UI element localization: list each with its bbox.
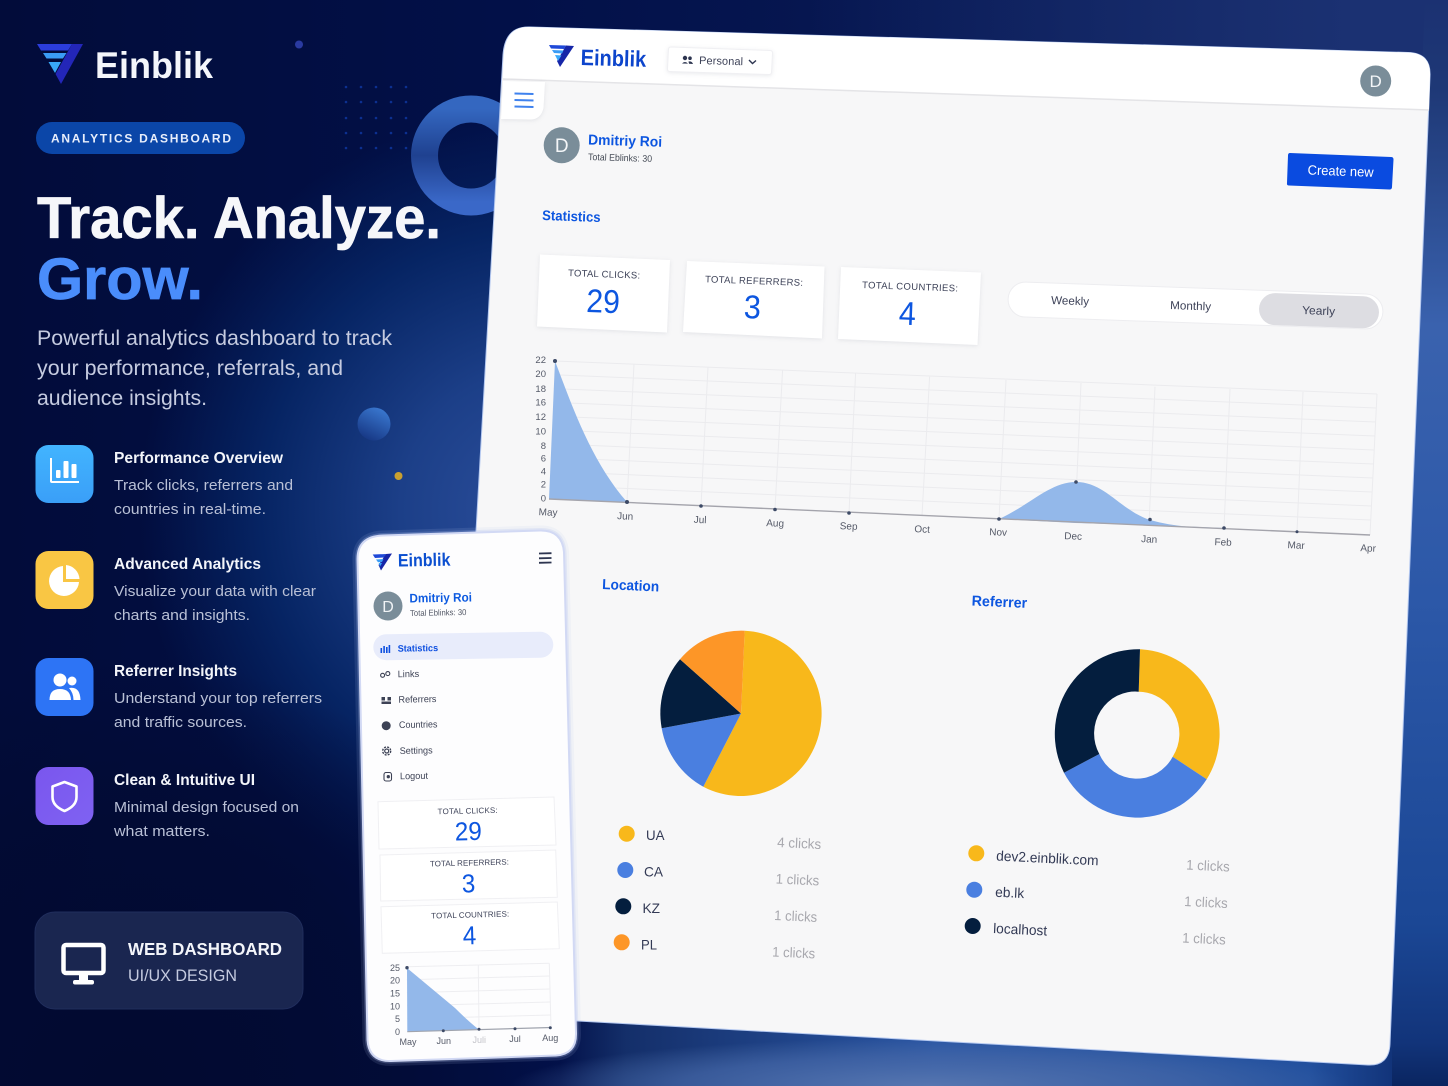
area: second peak <box>999 482 1224 528</box>
user profile <box>544 127 662 165</box>
headline: Track. Analyze. <box>37 186 441 251</box>
stat card: total clicks <box>537 254 670 332</box>
click counts <box>772 834 822 961</box>
brand logo <box>37 44 213 86</box>
web dashboard card <box>35 912 303 1009</box>
hamburger tab <box>501 81 545 120</box>
x axis labels: Sep <box>839 521 858 533</box>
referrer section: Referrer <box>971 594 1028 612</box>
user profile: Total Eblinks: 30 <box>588 152 652 165</box>
period toggle: Yearly <box>1302 305 1336 318</box>
feature: clean and intuitive ui: Minimal design focused on <box>114 799 299 816</box>
navigation menu: Logout <box>400 771 428 782</box>
x axis labels: Jan <box>1141 534 1157 546</box>
brand name: Einblik <box>580 45 647 72</box>
location section: Location <box>602 577 659 595</box>
intro paragraph <box>37 327 393 410</box>
grid lines <box>550 361 1377 535</box>
panel: mobile dashboard <box>357 530 576 1061</box>
user profile: D <box>555 136 569 157</box>
icon: statistics <box>380 645 390 653</box>
icon: people <box>36 658 94 716</box>
x axis labels <box>538 507 1377 555</box>
feature: performance overview <box>36 445 293 518</box>
legend <box>965 845 1099 939</box>
period toggle <box>1008 281 1383 330</box>
location section <box>602 577 822 961</box>
icon: links <box>381 672 390 677</box>
feature: advanced analytics <box>36 551 316 624</box>
click counts: 1 clicks <box>1184 893 1228 911</box>
feature: advanced analytics: charts and insights. <box>114 607 250 624</box>
donut chart <box>1055 649 1220 818</box>
legend: UA <box>646 827 665 843</box>
stat card: total clicks: TOTAL CLICKS: <box>438 806 498 816</box>
data points <box>553 359 1298 533</box>
stat card: total countries: TOTAL COUNTRIES: <box>862 280 958 295</box>
click counts: 1 clicks <box>774 907 818 925</box>
legend: KZ <box>642 900 660 916</box>
panel: desktop dashboard <box>450 27 1430 1065</box>
click counts: 1 clicks <box>1182 930 1226 948</box>
stat card: total referrers: 3 <box>461 868 476 898</box>
feature: referrer insights: Referrer Insights <box>114 663 237 680</box>
legend: CA <box>644 864 664 880</box>
create new button: Create new <box>1307 163 1374 180</box>
click counts <box>1182 857 1230 948</box>
feature: referrer insights: and traffic sources. <box>114 714 247 731</box>
y axis labels: 20 <box>390 976 400 986</box>
header bar <box>503 27 1430 110</box>
y axis labels: 8 <box>541 441 546 452</box>
x axis labels: Jun <box>436 1036 451 1046</box>
x axis labels <box>399 1033 558 1047</box>
feature: clean and intuitive ui: what matters. <box>113 823 210 840</box>
x axis labels: Mar <box>1287 540 1306 552</box>
stat card: total referrers: TOTAL REFERRERS: <box>430 858 509 868</box>
x axis labels: Feb <box>1214 537 1232 549</box>
icon: referrers <box>382 697 391 704</box>
navigation menu <box>373 632 553 782</box>
icon: settings <box>383 747 391 755</box>
area chart <box>535 355 1377 555</box>
stat card: total referrers <box>683 261 824 338</box>
icon: bar chart <box>36 445 94 503</box>
x axis labels: Oct <box>914 524 930 536</box>
y axis labels: 5 <box>395 1014 400 1024</box>
feature: advanced analytics: Advanced Analytics <box>114 556 261 573</box>
x axis labels: Nov <box>989 527 1007 539</box>
icon: logo small <box>373 554 392 570</box>
x axis labels: Aug <box>766 518 784 530</box>
pie chart <box>660 631 822 796</box>
x axis labels: Juli <box>473 1035 486 1045</box>
legend: localhost <box>993 920 1048 939</box>
feature: referrer insights <box>36 658 322 731</box>
navigation menu: Referrers <box>398 694 437 706</box>
y axis labels: 4 <box>541 466 546 478</box>
stat card: total countries <box>381 902 559 953</box>
decorative sphere <box>358 408 390 440</box>
web dashboard card: WEB DASHBOARD <box>128 939 282 959</box>
y axis labels: 18 <box>535 384 546 395</box>
x axis <box>407 1028 551 1032</box>
navigation menu: Statistics <box>398 643 438 655</box>
x axis labels: Jul <box>509 1034 521 1044</box>
y axis labels: 10 <box>390 1002 400 1012</box>
y axis labels: 12 <box>535 412 546 423</box>
stat card: total referrers: TOTAL REFERRERS: <box>705 274 803 289</box>
y axis labels: 0 <box>395 1027 400 1037</box>
y axis labels: 16 <box>535 398 546 408</box>
headline: Grow. <box>37 247 203 312</box>
y axis labels: 10 <box>535 426 546 438</box>
y axis labels: 15 <box>390 988 400 998</box>
y axis labels: 6 <box>541 454 546 464</box>
y axis labels: 25 <box>390 963 400 973</box>
feature: clean and intuitive ui <box>36 767 299 840</box>
dropdown: personal: Personal <box>699 55 743 68</box>
headline <box>37 186 441 312</box>
stat card: total clicks: TOTAL CLICKS: <box>568 268 640 282</box>
stat card: total referrers <box>380 850 557 901</box>
x axis <box>549 499 1370 535</box>
icon: monitor <box>64 945 104 984</box>
x axis labels: Jul <box>693 515 707 526</box>
stat card: total clicks <box>378 797 556 849</box>
web dashboard card: UI/UX DESIGN <box>128 966 237 985</box>
x axis labels: Apr <box>1360 543 1377 555</box>
y axis labels: 22 <box>535 355 546 366</box>
active menu item <box>373 632 553 660</box>
header bar: D <box>1370 72 1382 91</box>
avatar <box>1360 66 1391 96</box>
phone glow <box>357 530 576 1061</box>
navigation menu: Links <box>398 669 419 680</box>
user profile: Dmitriy Roi <box>409 590 472 605</box>
icon: logo <box>37 44 83 84</box>
badge <box>36 122 245 154</box>
legend <box>614 826 665 952</box>
y axis labels: 20 <box>535 369 546 380</box>
feature: performance overview: Track clicks, referrers and <box>114 477 293 494</box>
navigation menu: Countries <box>399 719 438 731</box>
x axis labels: Jun <box>617 511 633 523</box>
period toggle: Weekly <box>1051 295 1090 308</box>
dropdown: personal <box>668 47 772 74</box>
feature: performance overview: countries in real-time. <box>114 501 266 518</box>
legend: eb.lk <box>995 884 1026 901</box>
statistics heading: Statistics <box>542 207 601 225</box>
stat card: total clicks: 29 <box>586 282 621 320</box>
area chart <box>390 963 558 1047</box>
y axis labels <box>535 355 546 504</box>
icon: globe <box>382 721 391 730</box>
area <box>407 968 478 1032</box>
stat card: total clicks: 29 <box>454 816 482 846</box>
feature: performance overview: Performance Overview <box>114 450 284 467</box>
create new button <box>1287 153 1394 190</box>
stat card: total referrers: 3 <box>743 288 762 326</box>
intro paragraph: your performance, referrals, and <box>37 357 343 380</box>
decorative gold dot <box>394 472 402 480</box>
legend: PL <box>641 936 657 952</box>
click counts: 4 clicks <box>777 834 822 852</box>
decorative dot grid <box>345 86 407 149</box>
icon: shield <box>36 767 94 825</box>
y axis labels: 2 <box>541 480 546 490</box>
stat card: total countries: 4 <box>462 920 477 950</box>
y axis labels <box>390 963 400 1037</box>
x axis labels: May <box>538 507 558 519</box>
legend: dev2.einblik.com <box>996 848 1099 868</box>
icon: pie chart <box>36 551 94 609</box>
stat card: total countries: 4 <box>898 295 917 332</box>
feature: advanced analytics: Visualize your data with clear <box>114 583 316 600</box>
feature: clean and intuitive ui: Clean & Intuitive UI <box>114 772 255 789</box>
user profile: Total Eblinks: 30 <box>410 607 467 618</box>
user profile <box>374 590 472 620</box>
stat card: total countries: TOTAL COUNTRIES: <box>431 910 509 920</box>
period toggle: Monthly <box>1170 300 1212 313</box>
navigation menu: Settings <box>400 745 433 757</box>
icon: logout <box>384 772 392 781</box>
intro paragraph: Powerful analytics dashboard to track <box>37 327 393 350</box>
stat card: total countries <box>838 267 981 345</box>
brand name: Einblik <box>398 550 451 570</box>
y axis labels: 0 <box>541 494 546 504</box>
decorative ring <box>424 109 518 202</box>
icon: logo small <box>549 45 574 67</box>
decorative dot <box>295 40 303 48</box>
area: first peak <box>549 361 627 502</box>
brand name: Einblik <box>95 45 213 86</box>
click counts: 1 clicks <box>775 871 820 888</box>
click counts: 1 clicks <box>1186 857 1230 875</box>
icon: menu <box>539 553 552 563</box>
feature: referrer insights: Understand your top referrers <box>114 690 322 707</box>
user profile: D <box>382 599 394 616</box>
badge: ANALYTICS DASHBOARD <box>51 132 231 146</box>
x axis labels: May <box>399 1037 417 1047</box>
data points <box>405 966 552 1032</box>
click counts: 1 clicks <box>772 944 816 961</box>
user profile: Dmitriy Roi <box>588 133 662 151</box>
x axis labels: Aug <box>542 1033 558 1043</box>
intro paragraph: audience insights. <box>37 387 207 410</box>
referrer section <box>965 594 1230 948</box>
x axis labels: Dec <box>1064 531 1082 543</box>
